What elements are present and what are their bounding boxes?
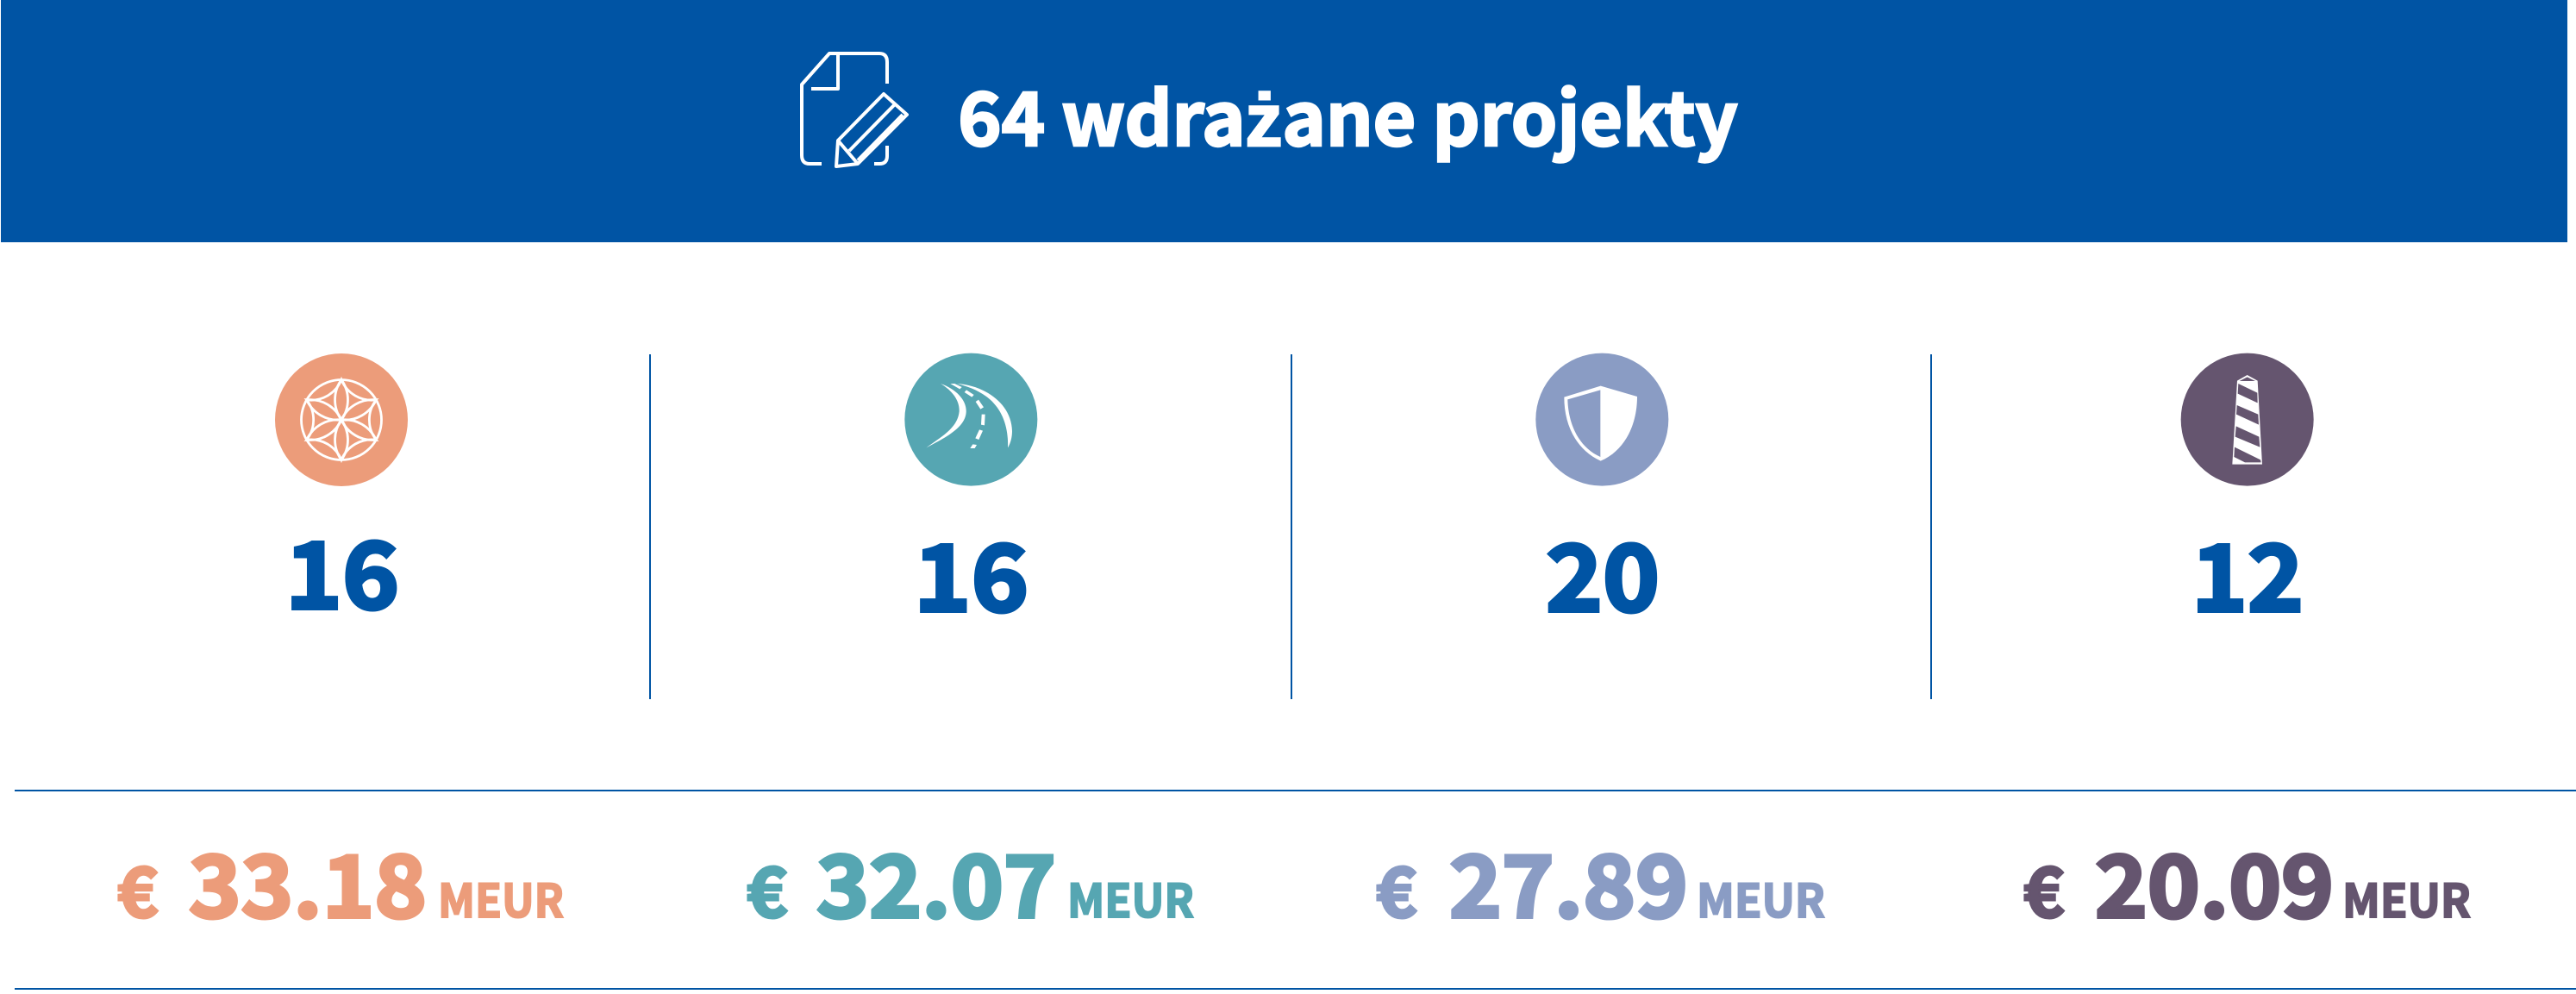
amount: 20.09 MEUR: 20.09 [2095,818,2334,942]
amount: 20.09 MEUR [2023,818,2471,942]
amount: 33.18 MEUR: € [117,838,158,938]
icon: border post (purple) [2181,353,2314,486]
project count: 16: 16 [285,502,399,635]
amount: 32.07 MEUR: 32.07 [816,818,1056,942]
project count: 20: 20 [1546,504,1660,638]
amount: 20.09 MEUR: MEUR [2342,866,2471,931]
icon: rosette (orange) [275,353,408,486]
amount: 27.89 MEUR: € [1376,838,1416,938]
icon: document with pencil [802,53,907,166]
amount: 27.89 MEUR: MEUR [1697,866,1825,931]
amount: 20.09 MEUR: € [2023,838,2064,938]
amount: 32.07 MEUR: MEUR [1067,866,1194,931]
title: 64 wdrażane projekty [958,59,1738,167]
horizontal rules [15,790,2576,990]
icon: road (teal) [904,353,1037,486]
column dividers [649,354,1932,699]
header banner [1,0,2567,242]
amount: 33.18 MEUR: MEUR [438,866,564,931]
amount: 32.07 MEUR: € [747,838,787,938]
project count: 16: 16 [914,504,1029,638]
amount: 27.89 MEUR: 27.89 [1449,818,1688,942]
amount: 33.18 MEUR [117,818,564,942]
icon: shield (periwinkle) [1535,353,1668,486]
project count: 12: 12 [2191,504,2304,638]
amount: 33.18 MEUR: 33.18 [189,818,427,942]
amount: 32.07 MEUR [747,818,1194,942]
amount: 27.89 MEUR [1376,818,1825,942]
